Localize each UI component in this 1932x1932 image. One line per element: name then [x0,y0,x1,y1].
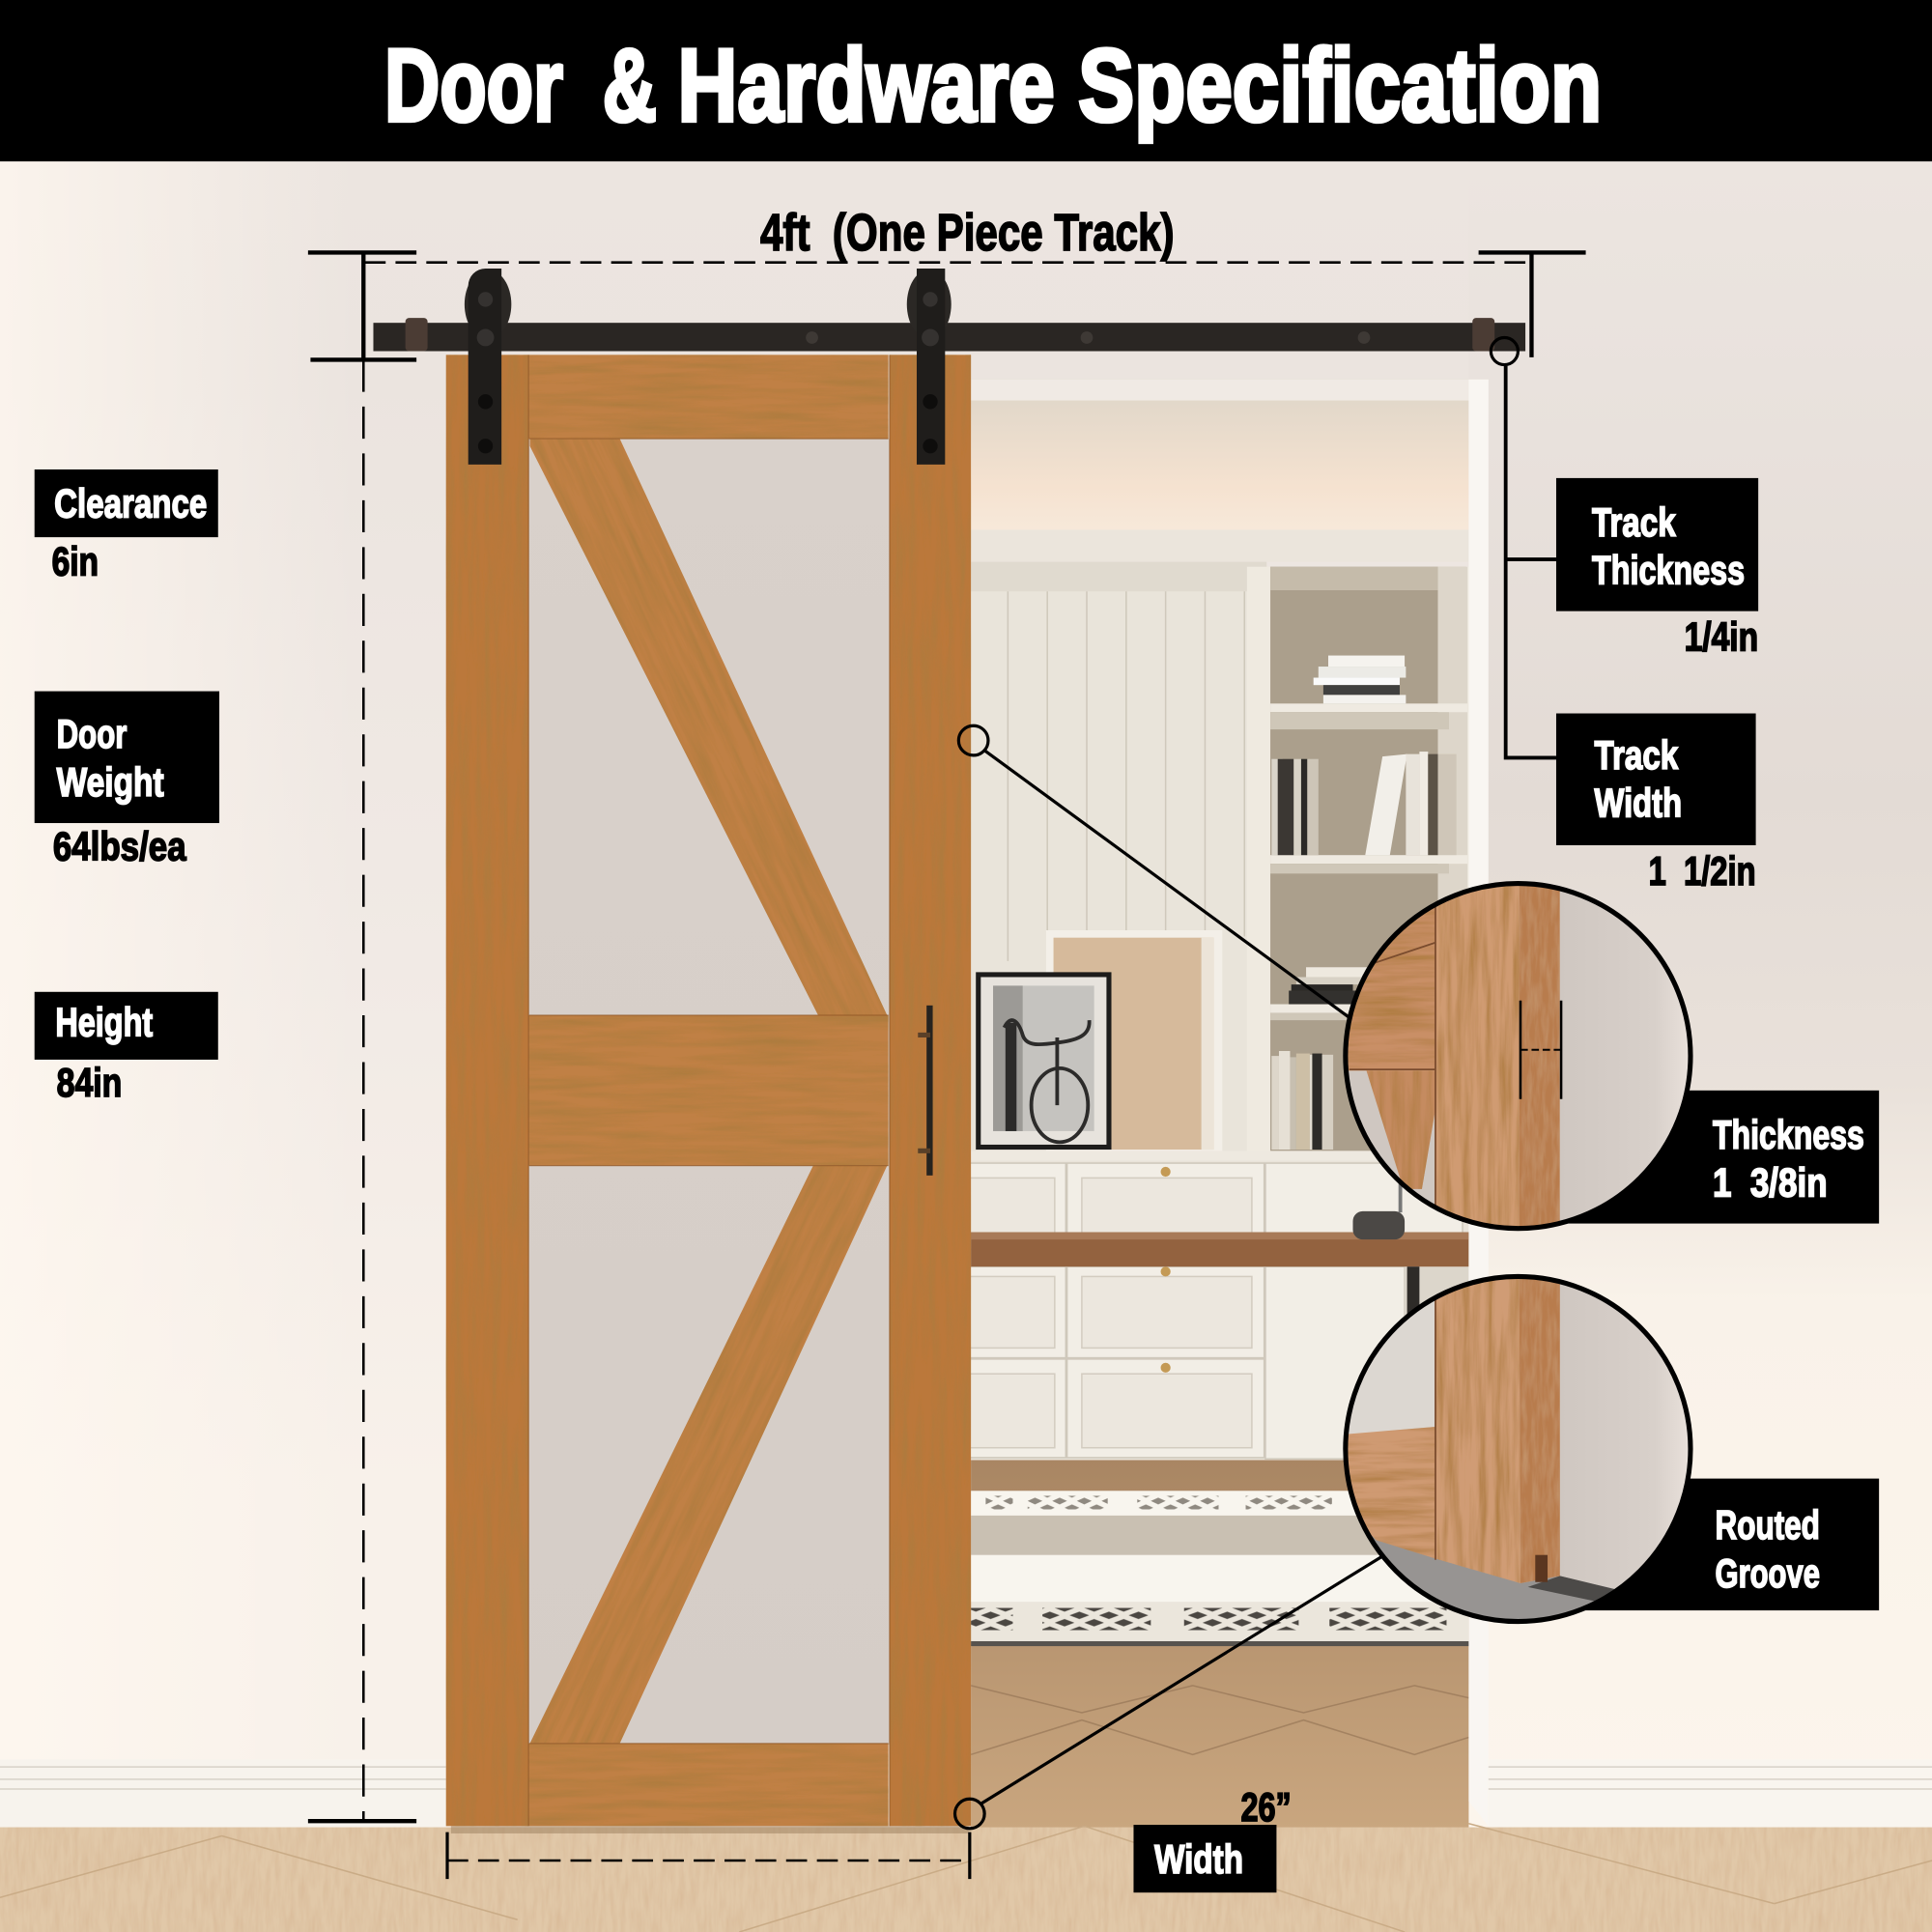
label: track thickness: Thickness [1592,548,1745,593]
label: routed groove [1552,1479,1879,1610]
label: track width [1556,714,1756,894]
label: door thickness: Thickness [1713,1112,1864,1157]
upper diagonal brace [529,439,887,1015]
inset: door thickness detail [1346,882,1695,1231]
label: routed groove: Routed [1716,1502,1820,1548]
label: door thickness: 1 3/8in [1713,1160,1828,1206]
label: track width: Track [1595,732,1679,778]
right stopper [1472,318,1494,352]
lower diagonal brace [529,1165,887,1744]
routed groove leader [955,1556,1382,1829]
baseboard [0,1759,1932,1829]
cup [1353,1171,1405,1239]
base cabinets [961,1151,1468,1466]
title bar [0,0,1932,161]
thickness marks [1520,1001,1561,1099]
right stile [890,355,971,1826]
label: track width: 1 1/2in [1649,848,1756,894]
label: track thickness [1556,478,1758,659]
title: Specification [1078,27,1602,143]
paneled back wall [971,562,1266,1153]
label: door weight [35,692,219,868]
title: Door [384,27,563,143]
door panels [528,439,890,1745]
label: height [35,992,218,1105]
title: & [603,27,657,143]
top rail [528,355,889,439]
lower books [1271,967,1368,1150]
label: door weight: 64lbs/ea [53,823,186,868]
crown molding [971,529,1468,562]
table [971,1233,1468,1266]
track length dimension [308,205,1586,357]
upright books [1271,752,1457,855]
sliding track [373,318,1525,352]
label: width: 26” [1240,1784,1292,1830]
left stile [446,355,528,1826]
track length label: 4ft (One Piece Track) [760,205,1175,262]
label: track width: Width [1595,781,1682,826]
track leader lines [1491,337,1556,757]
height dimension [308,252,416,1821]
left stopper [406,318,428,352]
label: height: Height [55,1000,153,1045]
label: clearance [35,469,218,584]
title: Hardware [678,27,1055,143]
label: width [1133,1784,1292,1892]
right hanger [907,269,952,465]
label: routed groove: Groove [1716,1550,1820,1596]
inset: routed groove detail [1343,1276,1695,1627]
ceiling [971,380,1468,532]
label: track thickness: 1/4in [1685,613,1758,659]
label: track thickness: Track [1592,499,1676,545]
door handle [918,1006,933,1176]
label: door thickness [1552,1091,1879,1224]
label: clearance: Clearance [54,481,207,526]
label: height: 84in [57,1060,122,1105]
label: door weight: Door [57,711,127,756]
label: width: Width [1154,1836,1243,1882]
left hanger [465,269,511,465]
bolts on track [806,331,1370,344]
door thickness leader [958,725,1353,1020]
bottom rail [528,1744,889,1826]
label: door weight: Weight [57,759,164,805]
rug [971,1491,1468,1646]
door shadow [451,1826,969,1833]
label: clearance: 6in [52,539,99,584]
door frame trim [971,380,1489,1826]
foreground floor [0,1824,1932,1932]
interior floor [971,1460,1468,1830]
art frame bicycle photograph [976,972,1112,1150]
width dimension [447,1833,970,1879]
room interior seen through doorway [961,380,1468,1830]
barn door [284,270,1154,1899]
middle rail [528,1015,889,1166]
art frame beige [1046,930,1222,1152]
bookcase [1247,567,1468,1153]
stacked books [1314,656,1406,703]
